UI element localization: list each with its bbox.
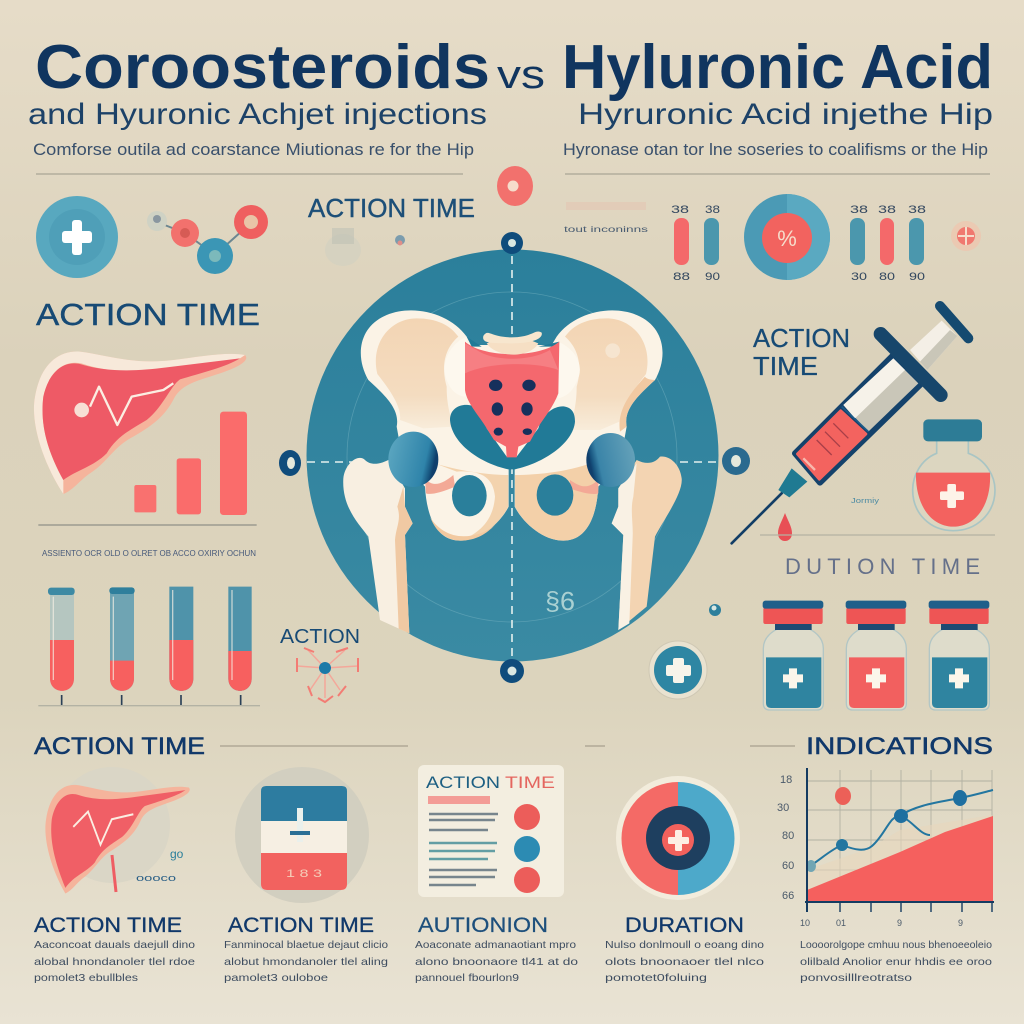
body text: alobut hmondanoler tlel aling: [224, 956, 388, 968]
title: Corticosteroids vs Hyaluronic Acid: vs: [497, 53, 545, 97]
left column: [34, 297, 360, 706]
body text: [415, 939, 578, 984]
body text: Loooorolgope cmhuu nous bhenoeeoleio: [800, 939, 992, 951]
icon: radial cell: [297, 648, 358, 702]
marker: right: [722, 447, 750, 475]
label: ACTION TIME: [228, 914, 374, 937]
right mini chart with pills and numbers: [850, 204, 926, 283]
body text: Nulso donlmoull o eoang dino: [605, 939, 764, 951]
card 3: document: [415, 765, 578, 984]
label: DURATION: [625, 914, 744, 937]
title: Corticosteroids vs Hyaluronic Acid: Coroosteroids: [35, 33, 490, 102]
sacrum: [465, 342, 559, 457]
chart: indications: 9: [958, 918, 963, 928]
left femur: [343, 458, 413, 633]
right mini chart with pills and numbers: 90: [909, 271, 925, 283]
sacrum side lobes: [445, 337, 467, 397]
left mini chart with pills and numbers: 38: [705, 204, 720, 216]
body text: [605, 939, 764, 984]
icon: target circle with pink center: [744, 194, 830, 280]
icon: plus button: [649, 641, 707, 699]
dashed axes: [307, 256, 719, 660]
body text: ponvosilllreotratso: [800, 972, 912, 984]
heading: action time right: TIME: [753, 351, 818, 381]
icon: target circle with pink center: %: [777, 226, 797, 251]
subtitle left: and Hyuronic Achjet injections: [28, 98, 487, 131]
right femur: [612, 456, 682, 630]
bar chart: [38, 412, 257, 525]
heading: action time right: [753, 323, 850, 381]
left hip bone: [361, 310, 509, 541]
icon: medicine box: 1 8 3: [286, 868, 322, 880]
vial 3: [929, 601, 989, 710]
left mini chart with pills and numbers: [564, 202, 720, 283]
icon: blue plus circle: [36, 196, 118, 278]
chart: indications: 80: [782, 830, 794, 842]
icon: pink top dot: [497, 166, 533, 206]
icon: medicine box: [235, 767, 369, 903]
marker: top: [501, 232, 523, 254]
section heading: indications: INDICATIONS: [806, 733, 993, 760]
test tubes: [38, 587, 260, 706]
body text: alobal hnondanoler tlel rdoe: [34, 956, 195, 968]
icon: syringe: [732, 306, 968, 543]
vial 1: [763, 601, 823, 710]
left mini chart with pills and numbers: 90: [705, 271, 720, 283]
caption right: Hyronase otan tor lne soseries to coalifisms or the Hip: [563, 140, 988, 159]
left mini chart with pills and numbers: 38: [671, 204, 689, 216]
right mini chart with pills and numbers: 30: [851, 271, 867, 283]
hip diagram: [306, 250, 719, 662]
icon: round vial: [913, 419, 995, 531]
right mini chart with pills and numbers: 38: [850, 204, 868, 216]
body text: pamolet3 ouloboe: [224, 972, 328, 984]
heading: duration time: DUTION TIME: [785, 554, 980, 579]
faint symbol on disc: §6: [545, 586, 575, 616]
icon: donut: [616, 776, 740, 900]
panel: action time sheet: [418, 765, 564, 897]
body text: pomotet0foluing: [605, 972, 707, 984]
top notches: [467, 337, 482, 347]
chart: indications: 30: [777, 802, 789, 814]
left mini chart with pills and numbers: 88: [673, 271, 690, 283]
left pubis: [437, 464, 508, 541]
icon: liver small: [45, 767, 190, 893]
panel: action time sheet: ACTION: [426, 773, 500, 792]
marker: left: [279, 450, 301, 476]
body text: olilbald Anolior enur hhdis ee oroo: [800, 956, 992, 968]
title: Corticosteroids vs Hyaluronic Acid: [35, 33, 993, 102]
baseline under syringe: [760, 534, 995, 536]
faint small label: Jormiy: [851, 498, 880, 505]
chart: indications: [777, 768, 994, 928]
body text: alono bnoonaore tl41 at do: [415, 956, 578, 968]
card 5: line chart: [777, 768, 994, 984]
chart: indications: 18: [780, 774, 792, 786]
chart: indications: 01: [836, 918, 846, 928]
heading: action time top: ACTION TIME: [308, 193, 475, 223]
card 4: donut: [605, 776, 764, 984]
small caption: ASSIENTO OCR OLD O OLRET OB ACCO OXIRIY OCHUN: [42, 549, 256, 558]
icon: liver small: oooco: [136, 873, 176, 883]
chart: indications: 9: [897, 918, 902, 928]
icon: molecule: [147, 205, 268, 274]
icon: blood drop: [778, 513, 792, 541]
caption left: Comforse outila ad coarstance Miutionas re for the Hip: [33, 140, 474, 159]
right hip bone: [515, 310, 663, 541]
body text: Fanminocal blaetue dejaut clicio: [224, 939, 388, 951]
icon: faint pink molecule: [951, 221, 981, 251]
left mini chart with pills and numbers: tout inconinns: [564, 225, 648, 234]
body text: [34, 939, 195, 984]
subtitle right: Hyruronic Acid injethe Hip: [578, 98, 993, 131]
right mini chart with pills and numbers: 80: [879, 271, 895, 283]
body text: Aaconcoat dauals daejull dino: [34, 939, 195, 951]
right mini chart with pills and numbers: 38: [908, 204, 926, 216]
marker: bottom: [500, 659, 524, 683]
faint blurred label: [325, 228, 405, 266]
label: AUTIONION: [418, 914, 548, 937]
title: Corticosteroids vs Hyaluronic Acid: Hyluronic Acid: [562, 33, 993, 102]
heading: action time right: ACTION: [753, 323, 850, 353]
right column: [732, 306, 995, 710]
body text: Aoaconate admanaotiant mpro: [415, 939, 576, 951]
chart: indications: 10: [800, 918, 810, 928]
heading: action time left: ACTION TIME: [36, 297, 260, 332]
right mini chart with pills and numbers: 38: [878, 204, 896, 216]
chart: indications: 66: [782, 890, 794, 902]
icon: small mark: [709, 604, 721, 616]
section heading: action time bottom: ACTION TIME: [34, 733, 205, 760]
icon: liver small: go: [170, 847, 184, 861]
vial 2: [846, 601, 906, 710]
body text: [224, 939, 388, 984]
icon: liver with ECG: [34, 352, 246, 494]
body text: olots bnoonaoer tlel nlco: [605, 956, 764, 968]
body text: pannouel fbourlon9: [415, 972, 519, 984]
L5 vertebra strip: [487, 340, 538, 355]
label: ACTION TIME: [34, 914, 182, 937]
label: action: ACTION: [280, 626, 360, 648]
body text: [800, 939, 992, 984]
femoral heads: [388, 432, 438, 487]
card 2: box: [224, 767, 388, 984]
pelvic cavity: [450, 405, 575, 469]
card 1: liver: [34, 767, 195, 984]
body text: pomolet3 ebullbles: [34, 972, 138, 984]
panel: action time sheet: TIME: [505, 773, 555, 792]
right pubis: [515, 460, 598, 541]
chart: indications: 60: [782, 860, 794, 872]
vials row: [763, 601, 989, 710]
